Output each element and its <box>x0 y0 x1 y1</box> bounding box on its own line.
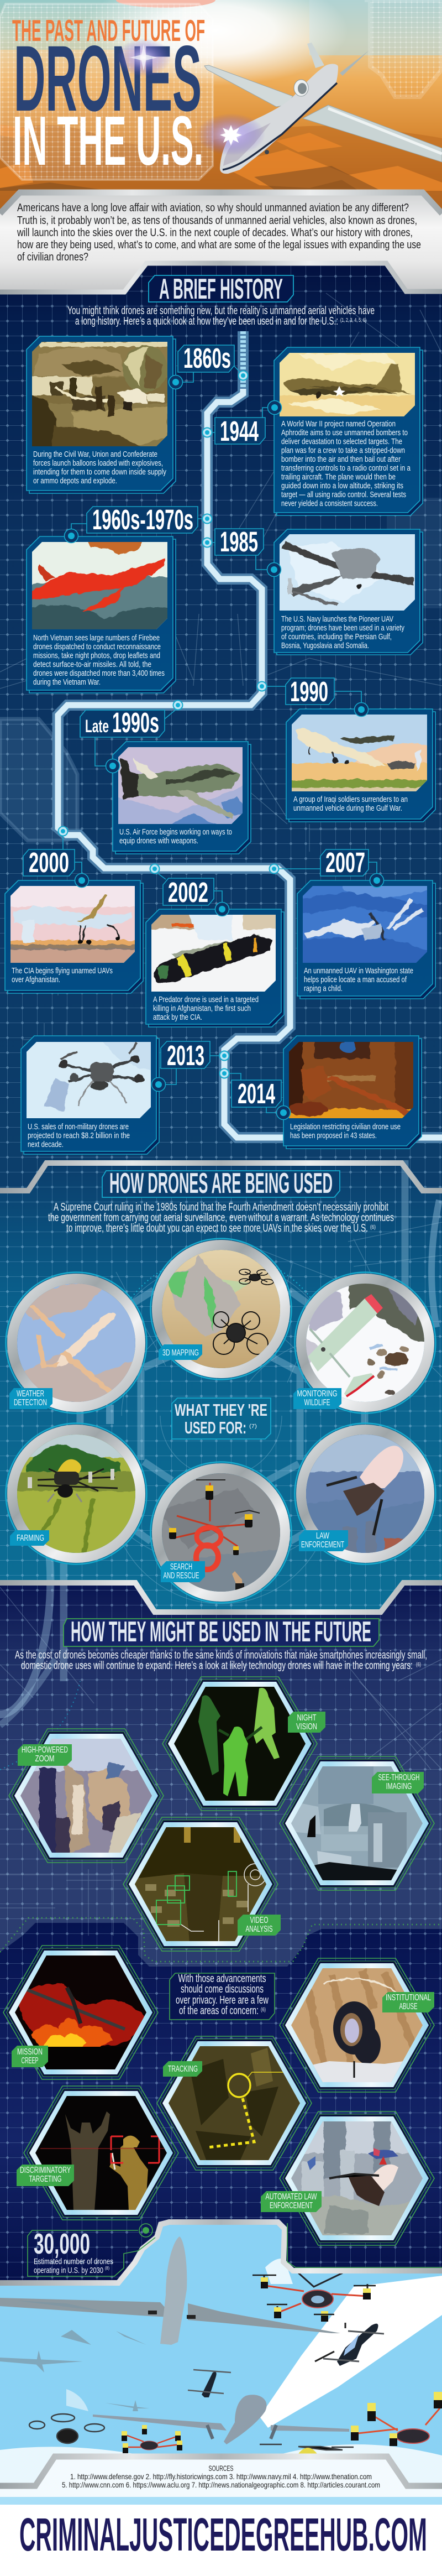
label: law enforcement: LAW <box>316 1531 330 1541</box>
year: 1960s-1970s <box>87 504 198 535</box>
card text: unmanned vehicle during the Gulf War. <box>293 804 402 813</box>
history section background <box>0 260 442 2287</box>
circle: 3d mapping <box>150 1239 292 1379</box>
stat callout: 30,000 drones: operating in U.S. by 2030 <box>34 2266 103 2275</box>
header sky photo <box>0 0 442 221</box>
flare on drone nose <box>197 113 265 155</box>
card: 2002 <box>146 909 284 1027</box>
card text: A group of Iraqi soldiers surrenders to an <box>293 795 408 804</box>
card: 2013 <box>21 1036 159 1154</box>
label: high-powered zoom: HIGH-POWERED <box>22 1745 68 1755</box>
label: see-through imaging: IMAGING <box>386 1782 412 1791</box>
dot: 2013 <box>151 1077 166 1092</box>
card text: U.S. Air Force begins working on ways to <box>119 827 232 837</box>
hexagon: mission creep <box>3 1946 158 2079</box>
card text: attack by the CIA. <box>153 1013 202 1022</box>
dot: 2000 <box>75 874 88 887</box>
circle: law enforcement <box>295 1423 435 1564</box>
future section rim <box>0 1583 442 1612</box>
label: tracking: TRACKING <box>168 2064 198 2074</box>
card text: forces launch balloons loaded with explosives, <box>33 458 163 468</box>
label: night vision <box>288 1712 325 1733</box>
header drone illustration <box>204 43 442 174</box>
dot: 1990 <box>355 702 368 717</box>
timeline node dots <box>59 371 278 1078</box>
how-used section rim <box>0 1163 442 1191</box>
year: 1944: 1944 <box>220 415 259 447</box>
image: bomber <box>280 353 415 416</box>
label: automated law enforcement: AUTOMATED LAW <box>265 2192 317 2202</box>
card text <box>281 419 411 508</box>
label: monitoring wildlife <box>293 1388 341 1409</box>
intro text <box>17 202 421 263</box>
sources panel <box>0 2457 442 2497</box>
label: tracking <box>163 2061 202 2077</box>
label: mission creep <box>12 2046 48 2067</box>
card text: program; drones have been used in a variety <box>281 623 404 633</box>
footer color band <box>0 2497 442 2505</box>
heading: a brief history: A BRIEF HISTORY <box>159 273 283 305</box>
privacy text box: of the areas of concern: <box>179 2005 259 2017</box>
sources panel: SOURCES <box>209 2464 233 2473</box>
quadcopter: lower left <box>29 2414 104 2443</box>
card text: equip drones with weapons. <box>119 836 198 846</box>
label: weather detection <box>9 1388 52 1409</box>
dot: 1985 <box>267 563 281 576</box>
card text <box>281 614 404 650</box>
year: 1960s-1970s: 1960s-1970s <box>92 504 193 535</box>
card text: intending for them to come down inside supply <box>33 467 166 477</box>
dot: 1860s <box>169 375 182 389</box>
timeline connector lines <box>63 366 377 1113</box>
card text: projected to reach $8.2 billion in the <box>28 1131 130 1140</box>
card text <box>293 795 408 813</box>
card text: plan was for a crew to take a stripped-down <box>281 446 405 455</box>
sources panel: 5. http://www.cnn.com 6. https://www.aclu.org 7. http://news.nationalgeographic.com 8. http://articles.courant.com <box>62 2480 380 2489</box>
card text: over Afghanistan. <box>12 975 60 984</box>
card text <box>153 995 259 1022</box>
circle: monitoring wildlife <box>295 1272 435 1414</box>
year: late 1990s <box>80 707 165 738</box>
label: 3d mapping <box>159 1344 202 1360</box>
dot: 1960s <box>64 529 78 543</box>
label: mission creep: CREEP <box>21 2056 39 2066</box>
card text: detect surface-to-air missiles. All told, the <box>33 660 151 669</box>
card: 2007 <box>297 880 435 999</box>
card: 1860s <box>27 336 176 493</box>
quadcopter: upper right <box>252 2273 376 2322</box>
label: farming: FARMING <box>17 1534 44 1543</box>
hexagon: video analysis <box>123 1817 278 1951</box>
card text: next decade. <box>28 1140 64 1149</box>
card text: killing in Afghanistan, the first such <box>153 1004 251 1013</box>
year: 2000: 2000 <box>29 847 69 878</box>
card text: The U.S. Navy launches the Pioneer UAV <box>281 614 393 624</box>
card text: target — all using radio control. Several tests <box>281 490 406 499</box>
circle: farming <box>6 1423 147 1564</box>
label: automated law enforcement: ENFORCEMENT <box>270 2201 313 2210</box>
label: discriminatory targeting: TARGETING <box>29 2175 62 2184</box>
card text: Bosnia, Yugoslavia and Somalia. <box>281 641 369 650</box>
card text: drones dispatched to conduct reconnaissance <box>33 642 161 651</box>
future intro text <box>15 1649 427 1672</box>
card text: raping a child. <box>304 984 343 993</box>
year: 1860s <box>178 342 234 374</box>
large drone bottom <box>93 2395 349 2444</box>
year: 2014: 2014 <box>238 1078 275 1109</box>
year: 2014 <box>231 1078 281 1109</box>
heading: a brief history <box>149 273 293 305</box>
how-used intro text: (6) <box>370 1224 376 1230</box>
label: monitoring wildlife: MONITORING <box>297 1389 337 1399</box>
year: 1944 <box>215 415 265 447</box>
label: law enforcement <box>299 1530 348 1551</box>
image: civil war balloon <box>32 342 167 446</box>
card text <box>33 450 166 486</box>
image: gulf war drone <box>287 715 431 794</box>
year: 2013 <box>161 1040 210 1071</box>
label: video analysis <box>238 1915 281 1936</box>
label: institutional abuse: ABUSE <box>399 2002 418 2011</box>
image: hellfire missile <box>148 911 279 992</box>
label: discriminatory targeting: DISCRIMINATORY <box>20 2166 71 2175</box>
privacy text box: With those advancements <box>178 1973 266 1985</box>
dot: 2007 <box>370 874 383 887</box>
year: 2007: 2007 <box>325 847 365 878</box>
card: 1944 <box>274 347 423 515</box>
label: search and rescue: AND RESCUE <box>164 1571 199 1581</box>
card text: bomber into the air and then bail out after <box>281 455 401 464</box>
hexagon: discriminatory targeting <box>24 2086 178 2220</box>
card text <box>28 1122 130 1149</box>
card text: A Predator drone is used in a targeted <box>153 995 259 1004</box>
quadcopter: center <box>188 2370 231 2397</box>
card text: of countries, including the Persian Gulf, <box>281 632 392 642</box>
card text: During the Civil War, Union and Confederate <box>33 450 157 459</box>
what they're used for box: USED FOR: <box>185 1418 246 1437</box>
label: automated law enforcement <box>261 2191 322 2212</box>
year: 1985 <box>215 526 264 557</box>
timeline path <box>58 331 442 1138</box>
large drone top <box>0 2236 340 2345</box>
year: late 1990s: 1990s <box>112 707 159 738</box>
card text: drones were dispatched more than 3,400 times <box>33 669 165 678</box>
card: late 1990s <box>113 742 251 854</box>
label: discriminatory targeting <box>17 2165 74 2186</box>
card text <box>119 827 232 846</box>
label: monitoring wildlife: WILDLIFE <box>304 1398 330 1407</box>
privacy text box <box>170 1973 275 2020</box>
image: gavel <box>289 1042 413 1118</box>
year: late 1990s: Late <box>85 716 109 736</box>
card text <box>290 1122 401 1140</box>
hexagon: see-through imaging <box>280 1756 434 1890</box>
image: firebee drone <box>32 542 167 629</box>
label: high-powered zoom <box>18 1744 72 1766</box>
year: 2002: 2002 <box>168 877 208 908</box>
label: weather detection: DETECTION <box>14 1398 47 1407</box>
heading: how drones are being used <box>102 1167 340 1200</box>
year: 1990: 1990 <box>290 676 328 707</box>
label: mission creep: MISSION <box>17 2047 43 2057</box>
label: video analysis: VIDEO <box>250 1916 269 1925</box>
image: predator <box>10 886 135 963</box>
title panel backdrop <box>0 4 213 180</box>
hexagon: automated law enforcement <box>280 2111 434 2245</box>
card text: U.S. sales of non-military drones are <box>28 1122 129 1131</box>
label: high-powered zoom: ZOOM <box>35 1754 54 1764</box>
quadcopter: lower right <box>260 2392 442 2454</box>
card text: missions, take night photos, drop leaflets and <box>33 651 160 660</box>
year: 2002 <box>163 877 214 908</box>
label: institutional abuse <box>382 1992 434 2012</box>
privacy text box: over privacy. Here are a few <box>176 1994 269 2006</box>
stat callout: 30,000 drones: (8) <box>105 2266 109 2271</box>
image: pioneer drone <box>280 534 415 611</box>
hexagon: tracking <box>157 2036 312 2170</box>
faint far drones <box>0 2301 149 2411</box>
year: 2007 <box>320 847 369 878</box>
sources panel: 1. http://www.defense.gov 2. http://fly.historicwings.com 3. http://www.navy.mil 4. http://www.thenation.com <box>70 2472 372 2481</box>
card text: during the Vietnam War. <box>33 677 101 687</box>
dot: 2002 <box>215 903 229 916</box>
blueprint background strokes <box>0 293 442 1962</box>
hexagon: high-powered zoom <box>9 1729 164 1863</box>
dot: late 1990s <box>106 759 119 773</box>
year: 1985: 1985 <box>220 526 258 557</box>
label: night vision: VISION <box>296 1722 317 1732</box>
label: 3d mapping: 3D MAPPING <box>162 1348 199 1358</box>
card text: Aphrodite aims to use unmanned bombers to <box>281 428 408 437</box>
card text: A World War II project named Operation <box>281 419 396 429</box>
intro text: of civilian drones? <box>17 251 88 263</box>
year: 2013: 2013 <box>167 1040 204 1071</box>
hexagon: night vision <box>162 1677 317 1811</box>
card text: deliver devastation to selected targets. The <box>281 437 402 446</box>
label: weather detection: WEATHER <box>17 1389 44 1399</box>
card: 1985 <box>274 529 423 655</box>
card text: Legislation restricting civilian drone use <box>290 1122 401 1131</box>
card text <box>12 966 113 984</box>
stat callout: 30,000 drones <box>28 2223 442 2276</box>
stat callout: 30,000 drones: Estimated number of drones <box>34 2257 113 2266</box>
what they're used for box: WHAT THEY 'RE <box>175 1400 267 1420</box>
quadcopter: lower middle <box>122 2425 182 2453</box>
circle: search and rescue <box>150 1462 292 1603</box>
image: quadcopter <box>27 1039 155 1118</box>
privacy text box: (6) <box>261 2007 266 2013</box>
label: see-through imaging: SEE-THROUGH <box>378 1773 420 1782</box>
history intro text <box>67 305 375 327</box>
year: 2000 <box>23 847 75 878</box>
card text: or ammo depots and explode. <box>33 476 117 486</box>
label: law enforcement: ENFORCEMENT <box>301 1540 344 1550</box>
label: search and rescue <box>161 1561 205 1582</box>
hexagon: institutional abuse <box>280 1958 434 2092</box>
label: night vision: NIGHT <box>297 1713 317 1723</box>
label: see-through imaging <box>372 1772 424 1793</box>
label: farming <box>10 1530 49 1546</box>
dot: 1944 <box>267 400 282 415</box>
card: 1990 <box>286 709 435 822</box>
text: IN THE U.S. <box>13 102 203 180</box>
label: search and rescue: SEARCH <box>170 1562 192 1572</box>
text: THE PAST AND FUTURE OF <box>12 13 205 48</box>
card text: has been proposed in 43 states. <box>290 1131 377 1140</box>
card text: guided down into a low altitude, striking its <box>281 481 403 491</box>
dot: 2014 <box>276 1106 291 1119</box>
year: 1990 <box>286 676 334 707</box>
sky illustration: drone swarm <box>0 2222 442 2505</box>
intro panel <box>0 192 442 292</box>
privacy text box: should come discussions <box>181 1983 264 1995</box>
label: video analysis: ANALYSIS <box>245 1925 273 1934</box>
what they're used for box: (7) <box>249 1423 257 1430</box>
card text: trailing aircraft. The plane would then be <box>281 472 396 482</box>
30,000 rim <box>0 2222 442 2283</box>
title: lens flare <box>116 39 171 76</box>
card: 1960s-1970s <box>27 536 176 693</box>
card text: The CIA begins flying unarmed UAVs <box>12 966 113 976</box>
card text <box>33 633 165 687</box>
card text: helps police locate a man accused of <box>304 975 407 984</box>
year: 1860s: 1860s <box>183 342 231 374</box>
text: DRONES <box>14 26 202 131</box>
card text <box>304 966 413 993</box>
future intro text: (6) <box>416 1662 421 1668</box>
card text: never yielded a consistent success. <box>281 499 378 508</box>
image: reaper over water <box>303 886 427 963</box>
stat callout: 30,000 drones: 30,000 <box>34 2228 90 2260</box>
card: 2000 <box>5 880 143 993</box>
card: 2014 <box>283 1036 422 1149</box>
card text: North Vietnam sees large numbers of Firebee <box>33 633 160 643</box>
quadcopter: mid right <box>315 2323 384 2366</box>
image: global hawk <box>118 747 243 824</box>
title panel grid <box>0 4 213 180</box>
history intro text: (1, 2, 3, 4, 5, 6) <box>340 317 366 324</box>
circle: weather detection <box>6 1272 147 1414</box>
what they're used for box <box>172 1398 271 1439</box>
how-used intro text <box>48 1201 394 1234</box>
